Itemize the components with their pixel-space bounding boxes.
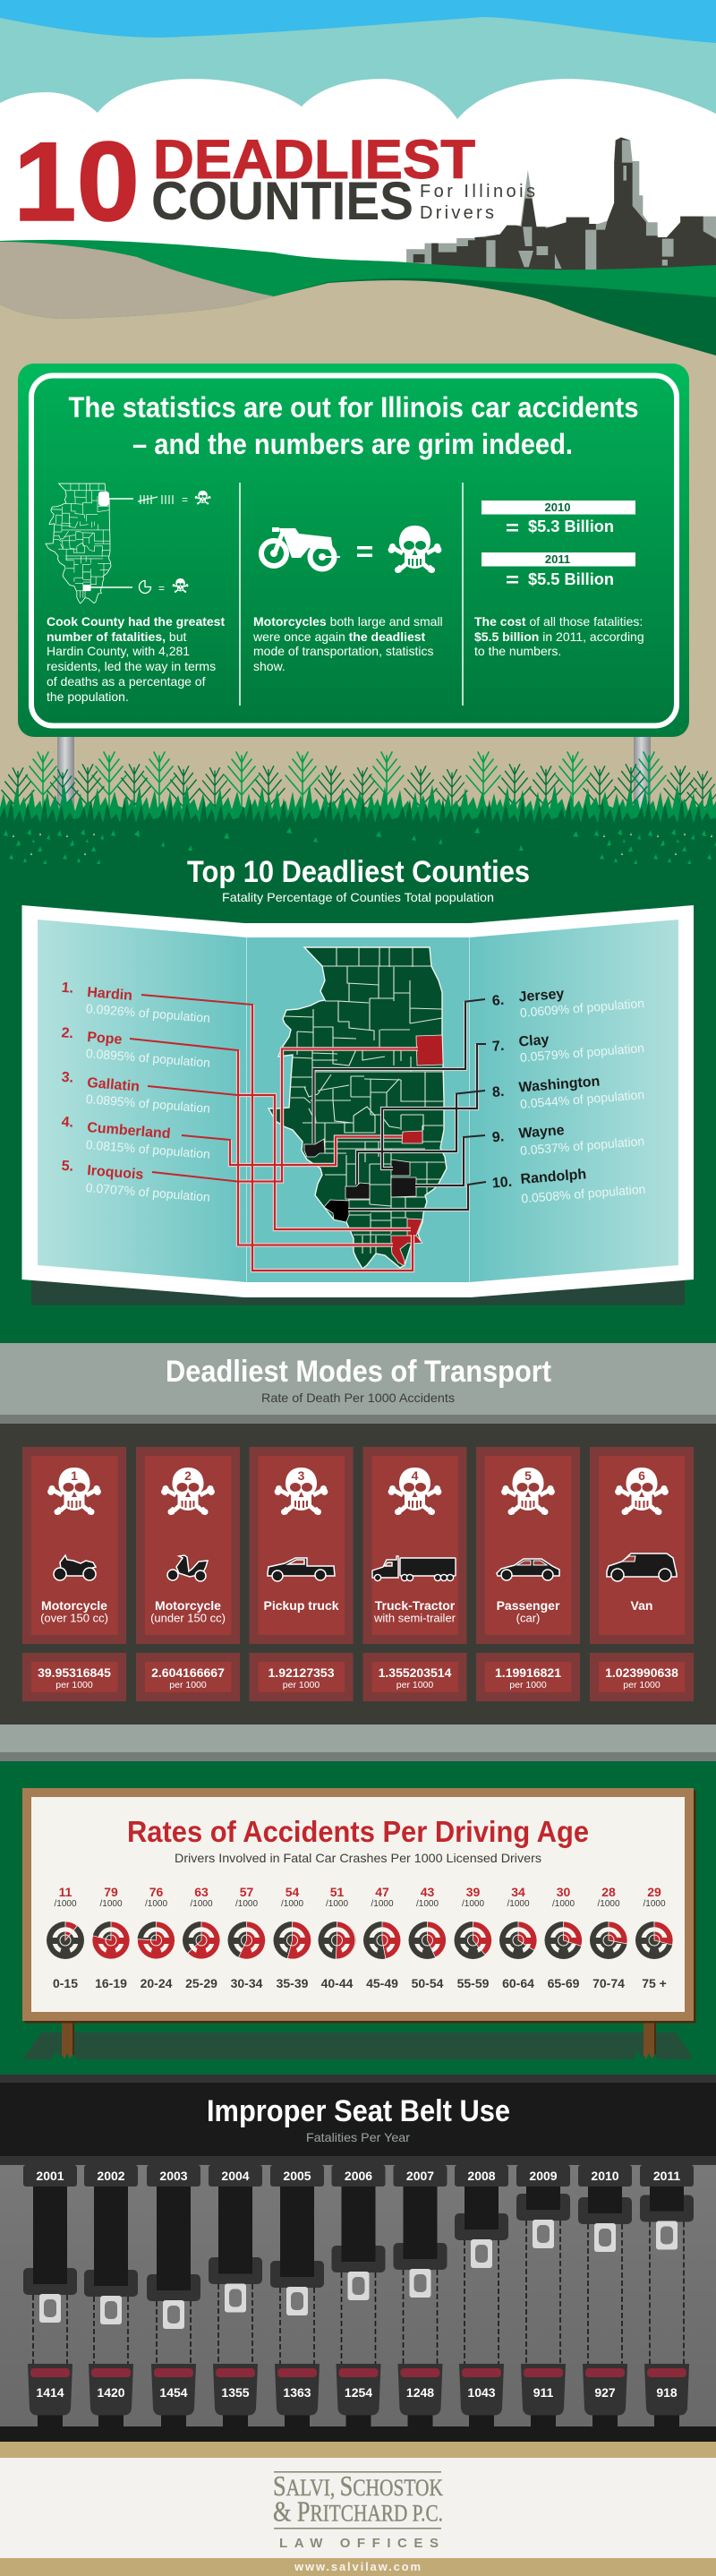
sign headline: The statistics are out for Illinois car accidents bbox=[68, 391, 639, 424]
heading: top 10 counties bbox=[187, 855, 530, 904]
steering wheel chart: /1000 bbox=[99, 1899, 123, 1909]
card 1: per 1000 bbox=[55, 1680, 93, 1690]
panel: improper seat belt use bbox=[0, 2075, 716, 2442]
steering wheel chart: /1000 bbox=[597, 1899, 620, 1909]
steering wheel chart: 54 bbox=[286, 1885, 299, 1899]
county labels left: Pope bbox=[87, 1030, 123, 1048]
county labels left: 0.0895% of population bbox=[85, 1091, 211, 1116]
card 3: per 1000 bbox=[283, 1680, 320, 1690]
icon: car bbox=[497, 1559, 559, 1580]
county labels right: 8. bbox=[491, 1084, 505, 1100]
title bbox=[13, 120, 535, 244]
county labels left: Hardin bbox=[87, 985, 133, 1004]
text: cost bbox=[474, 614, 644, 658]
card 6 bbox=[590, 1447, 694, 1701]
grass band bbox=[0, 752, 716, 833]
text: Motorcycles: mode of transportation, statistics bbox=[253, 644, 434, 658]
belt chart: 2003 bbox=[159, 2169, 188, 2183]
steering wheel chart: 40-44 bbox=[321, 1976, 354, 1990]
icon: scooter bbox=[167, 1555, 208, 1581]
highlighted counties bbox=[304, 1035, 443, 1266]
belt chart: 1248 bbox=[406, 2385, 434, 2400]
text: Motorcycles: were once again the deadliest bbox=[252, 629, 426, 644]
county labels left: 3. bbox=[61, 1070, 74, 1086]
connector lines: black bbox=[313, 999, 486, 1210]
steering wheel chart: 39 bbox=[466, 1885, 480, 1899]
county labels right: 0.0544% of population bbox=[519, 1087, 645, 1111]
county labels left: 0.0707% of population bbox=[85, 1180, 210, 1204]
steering wheel chart: /1000 bbox=[416, 1899, 439, 1909]
belt chart: 2009 bbox=[529, 2169, 558, 2183]
cost by year bbox=[482, 501, 635, 588]
belt chart: 2007 bbox=[406, 2169, 434, 2183]
steering wheel chart: 34 bbox=[511, 1885, 525, 1899]
steering wheel chart: /1000 bbox=[145, 1899, 167, 1909]
card 4: with semi-trailer bbox=[373, 1612, 456, 1624]
card 2 bbox=[136, 1447, 240, 1701]
logo: law firm: LAW OFFICES bbox=[279, 2536, 439, 2551]
card 2: Motorcycle bbox=[155, 1598, 221, 1613]
text: Cook County: Hardin County, with 4,281 bbox=[47, 644, 190, 658]
card 2: (under 150 cc) bbox=[150, 1612, 226, 1624]
heading: modes of transport: Deadliest Modes of Transport bbox=[166, 1355, 551, 1389]
card 2: 2.604166667 bbox=[151, 1665, 225, 1680]
steering wheel chart: 35-39 bbox=[277, 1976, 309, 1990]
tally marks bbox=[138, 495, 173, 504]
text: cost: The cost of all those fatalities: bbox=[474, 614, 643, 629]
steering wheel chart: 25-29 bbox=[185, 1976, 217, 1990]
card 4: per 1000 bbox=[396, 1680, 433, 1690]
title: COUNTIES bbox=[151, 171, 413, 231]
steering wheel chart: /1000 bbox=[552, 1899, 575, 1909]
steering wheel chart: 79 bbox=[104, 1885, 118, 1899]
steering wheel chart: 47 bbox=[375, 1885, 389, 1899]
background: sky and hills bbox=[0, 0, 716, 833]
steering wheel chart: 30 bbox=[557, 1885, 570, 1899]
steering wheel chart bbox=[47, 1885, 673, 1990]
title: For Illinois bbox=[420, 182, 535, 201]
county labels right: Randolph bbox=[520, 1167, 587, 1187]
belt chart: 2001 bbox=[36, 2169, 64, 2183]
steering wheel chart: 76 bbox=[149, 1885, 163, 1899]
county labels left: Iroquois bbox=[87, 1163, 144, 1183]
heading: seat belt bbox=[207, 2094, 510, 2144]
belt chart: 1414 bbox=[36, 2385, 64, 2400]
steering wheel chart: 20-24 bbox=[141, 1976, 173, 1990]
icon: motorcycle equals skull bbox=[261, 526, 441, 573]
belt chart: 1043 bbox=[467, 2385, 496, 2400]
card 4: 4 bbox=[412, 1468, 419, 1483]
card 1 bbox=[22, 1447, 126, 1701]
card 1: Motorcycle bbox=[41, 1598, 107, 1613]
steering wheel chart: 0-15 bbox=[53, 1976, 78, 1990]
county labels left: 0.0895% of population bbox=[85, 1046, 211, 1070]
heading: top 10 counties: Fatality Percentage of Counties Total population bbox=[222, 890, 494, 904]
card 3: 1.92127353 bbox=[268, 1665, 335, 1680]
heading: seat belt: Fatalities Per Year bbox=[306, 2130, 410, 2144]
card 4: 1.355203514 bbox=[379, 1665, 452, 1680]
county labels right: 10. bbox=[491, 1175, 513, 1191]
belt chart: 2006 bbox=[345, 2169, 372, 2183]
steering wheel chart: /1000 bbox=[235, 1899, 258, 1909]
card 3: 3 bbox=[298, 1468, 305, 1483]
text: cost: to the numbers. bbox=[474, 644, 561, 658]
county labels right: 0.0609% of population bbox=[519, 996, 645, 1020]
steering wheel chart: 29 bbox=[647, 1885, 661, 1899]
heading: top 10 counties: Top 10 Deadliest Counties bbox=[187, 855, 530, 889]
card 2: per 1000 bbox=[169, 1680, 207, 1690]
belt chart: 2011 bbox=[653, 2169, 680, 2183]
sign headline bbox=[68, 391, 639, 460]
belt chart: 1254 bbox=[345, 2385, 372, 2400]
small Illinois map with callouts: = bbox=[182, 493, 188, 506]
steering wheel chart: 50-54 bbox=[412, 1976, 444, 1990]
section background: green field bbox=[0, 828, 716, 1344]
card 1: 1 bbox=[71, 1468, 78, 1483]
heading: driving age bbox=[127, 1815, 589, 1865]
belt chart: 2008 bbox=[467, 2169, 496, 2183]
steering wheel chart: 63 bbox=[194, 1885, 209, 1899]
text: Cook County bbox=[47, 614, 225, 704]
pie fraction bbox=[140, 580, 150, 593]
steering wheel chart: /1000 bbox=[507, 1899, 530, 1909]
belt chart: 1420 bbox=[97, 2385, 125, 2400]
cost by year: 2010 bbox=[545, 501, 570, 514]
card 5: Passenger bbox=[497, 1598, 560, 1613]
footer bbox=[0, 2442, 716, 2576]
logo: law firm bbox=[273, 2469, 443, 2551]
icon: van bbox=[607, 1553, 677, 1581]
card 5: per 1000 bbox=[509, 1680, 547, 1690]
connector lines: red bbox=[130, 995, 418, 1271]
cost by year: $5.5 Billion bbox=[528, 570, 614, 588]
belt chart: 1454 bbox=[159, 2385, 188, 2400]
steering wheel chart: 43 bbox=[421, 1885, 434, 1899]
card 5 bbox=[476, 1447, 580, 1701]
heading: seat belt: Improper Seat Belt Use bbox=[207, 2094, 510, 2128]
card 4 bbox=[363, 1447, 467, 1701]
icon: sport motorcycle bbox=[54, 1555, 96, 1580]
card 5: (car) bbox=[516, 1612, 540, 1624]
county labels right: 7. bbox=[491, 1039, 505, 1055]
belt chart: 927 bbox=[594, 2385, 616, 2400]
panel: green road sign bbox=[18, 364, 689, 737]
sign poles bbox=[57, 737, 651, 817]
belt chart bbox=[23, 2165, 694, 2426]
icon: semi truck bbox=[372, 1556, 456, 1581]
steering wheel chart: /1000 bbox=[371, 1899, 394, 1909]
heading: driving age: Rates of Accidents Per Driving Age bbox=[127, 1815, 589, 1848]
county labels right: 0.0508% of population bbox=[521, 1182, 646, 1206]
card 1: (over 150 cc) bbox=[40, 1612, 108, 1624]
steering wheel chart: /1000 bbox=[54, 1899, 77, 1909]
county labels left: 1. bbox=[61, 980, 74, 997]
county labels right: 9. bbox=[491, 1129, 505, 1145]
grass specks bbox=[0, 827, 716, 869]
text: Cook County: number of fatalities, but bbox=[47, 629, 186, 644]
text: Cook County: Cook County had the greatest bbox=[47, 614, 225, 629]
text: Motorcycles: Motorcycles both large and small bbox=[253, 614, 443, 629]
county labels right: 0.0537% of population bbox=[519, 1134, 645, 1158]
belt chart: 2010 bbox=[591, 2169, 619, 2183]
icon: pickup truck bbox=[268, 1558, 335, 1581]
steering wheel chart: 60-64 bbox=[502, 1976, 534, 1990]
card 6: 6 bbox=[638, 1468, 645, 1483]
county labels right: Wayne bbox=[518, 1123, 565, 1142]
card 2: 2 bbox=[184, 1468, 192, 1483]
text: cost: $5.5 billion in 2011, according bbox=[474, 629, 644, 644]
county labels left: Cumberland bbox=[87, 1120, 171, 1142]
city skyline bbox=[406, 137, 716, 271]
steering wheel chart: /1000 bbox=[190, 1899, 213, 1909]
belt chart: 2004 bbox=[221, 2169, 250, 2183]
cost by year: 2011 bbox=[545, 552, 570, 566]
county labels right: Clay bbox=[518, 1032, 550, 1050]
county labels left bbox=[59, 980, 212, 1204]
title: DEADLIEST bbox=[153, 129, 475, 190]
county labels right: 6. bbox=[491, 993, 505, 1009]
belt chart: 1363 bbox=[283, 2385, 311, 2400]
card 4: Truck-Tractor bbox=[375, 1598, 456, 1613]
heading: modes of transport bbox=[166, 1355, 551, 1405]
title: 10 bbox=[13, 120, 140, 244]
card 3: Pickup truck bbox=[263, 1598, 339, 1613]
heading: driving age: Drivers Involved in Fatal Car Crashes Per 1000 Licensed Drivers bbox=[175, 1851, 541, 1865]
sign headline: – and the numbers are grim indeed. bbox=[132, 428, 573, 460]
steering wheel chart: 65-69 bbox=[548, 1976, 580, 1990]
card 6: per 1000 bbox=[623, 1680, 661, 1690]
county labels right bbox=[491, 980, 646, 1208]
text: Cook County: the population. bbox=[47, 689, 129, 704]
card 1: 39.95316845 bbox=[38, 1665, 111, 1680]
belt chart: 918 bbox=[656, 2385, 678, 2400]
billboard: rates per driving age bbox=[22, 1788, 696, 2060]
panel: folded map billboard bbox=[21, 905, 694, 1305]
small Illinois map with callouts bbox=[46, 484, 211, 603]
cost by year: $5.3 Billion bbox=[528, 518, 614, 535]
text: Motorcycles bbox=[252, 614, 443, 673]
steering wheel chart: 51 bbox=[330, 1885, 344, 1899]
small Illinois map with callouts: = bbox=[158, 582, 165, 595]
text: Cook County: of deaths as a percentage of bbox=[47, 674, 206, 689]
county labels right: Jersey bbox=[518, 987, 565, 1006]
website: www.salvilaw.com bbox=[294, 2560, 421, 2573]
heading: modes of transport: Rate of Death Per 1000 Accidents bbox=[261, 1391, 455, 1405]
county labels left: 2. bbox=[61, 1025, 74, 1041]
steering wheel chart: 70-74 bbox=[592, 1976, 625, 1990]
Illinois county map bbox=[268, 947, 447, 1269]
belt chart: 2002 bbox=[97, 2169, 125, 2183]
card 6: Van bbox=[631, 1598, 652, 1613]
steering wheel chart: 55-59 bbox=[457, 1976, 490, 1990]
text: Motorcycles: show. bbox=[253, 659, 286, 673]
dividers bbox=[240, 483, 463, 706]
panel: field behind age billboard bbox=[0, 1761, 716, 2075]
county labels left: 0.0926% of population bbox=[85, 1001, 211, 1025]
steering wheel chart: 57 bbox=[240, 1885, 253, 1899]
title: Drivers bbox=[420, 203, 494, 223]
steering wheel chart: 16-19 bbox=[95, 1976, 127, 1990]
belt chart: 911 bbox=[533, 2385, 554, 2400]
card 5: 1.19916821 bbox=[495, 1665, 561, 1680]
logo: law firm: SALVI, SCHOSTOK bbox=[273, 2469, 443, 2502]
steering wheel chart: /1000 bbox=[643, 1899, 666, 1909]
logo: law firm: & PRITCHARD P.C. bbox=[273, 2495, 443, 2527]
text: Cook County: residents, led the way in terms bbox=[47, 659, 216, 673]
steering wheel chart: 75 + bbox=[642, 1976, 667, 1990]
steering wheel chart: /1000 bbox=[281, 1899, 303, 1909]
belt chart: 2005 bbox=[283, 2169, 311, 2183]
county labels left: 4. bbox=[61, 1115, 74, 1131]
card 6: 1.023990638 bbox=[605, 1665, 678, 1680]
card 3 bbox=[249, 1447, 353, 1701]
steering wheel chart: 45-49 bbox=[366, 1976, 398, 1990]
county labels left: 0.0815% of population bbox=[85, 1137, 210, 1161]
card 5: 5 bbox=[524, 1468, 532, 1483]
belt chart: 1355 bbox=[221, 2385, 250, 2400]
steering wheel chart: 30-34 bbox=[231, 1976, 263, 1990]
steering wheel chart: 11 bbox=[59, 1885, 72, 1899]
county labels right: 0.0579% of population bbox=[519, 1040, 645, 1065]
county labels left: 5. bbox=[61, 1159, 74, 1175]
county labels right: Washington bbox=[518, 1074, 601, 1096]
panel: deadliest modes of transport bbox=[0, 1343, 716, 1761]
steering wheel chart: /1000 bbox=[462, 1899, 484, 1909]
steering wheel chart: 28 bbox=[601, 1885, 616, 1899]
county labels left: Gallatin bbox=[87, 1075, 141, 1095]
steering wheel chart: /1000 bbox=[326, 1899, 348, 1909]
